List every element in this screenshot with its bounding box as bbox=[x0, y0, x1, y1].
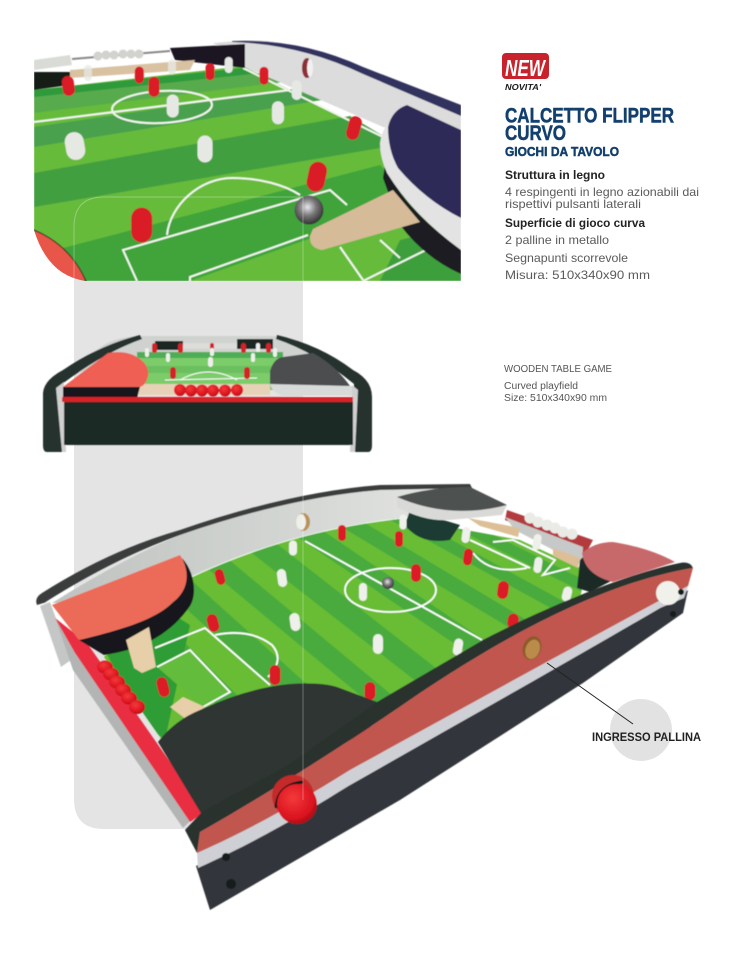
title bbox=[505, 104, 674, 159]
product features text: Superficie di gioco curva bbox=[505, 216, 645, 230]
left end cap bbox=[40, 602, 71, 667]
far goal blocks bbox=[155, 339, 273, 350]
english description text bbox=[504, 364, 612, 404]
white stripe bbox=[197, 586, 688, 868]
product features text: Misura: 510x340x90 mm bbox=[505, 268, 650, 282]
photo: main board bbox=[2, 484, 735, 910]
right white strip bbox=[350, 385, 358, 452]
product features text: 2 palline in metallo bbox=[505, 233, 609, 247]
left side rail bbox=[55, 618, 205, 828]
product features text bbox=[505, 168, 699, 282]
badge text novita: NOVITA' bbox=[505, 82, 542, 92]
badge: new bbox=[502, 53, 549, 92]
photo: board front view bbox=[43, 335, 372, 452]
badge text new: NEW bbox=[505, 55, 547, 81]
ball entry hole bbox=[519, 634, 545, 662]
product features text: Struttura in legno bbox=[505, 168, 605, 182]
faint panel edge over board bbox=[302, 490, 304, 800]
dark lower side bbox=[196, 590, 688, 910]
title: GIOCHI DA TAVOLO bbox=[505, 144, 619, 159]
large dark pad bbox=[158, 683, 377, 815]
wood flipper strip bbox=[137, 384, 270, 395]
front rim bbox=[185, 563, 693, 853]
salmon band bbox=[197, 568, 693, 853]
red pad bbox=[63, 352, 148, 398]
title: CURVO bbox=[505, 121, 566, 145]
back wall and rail bbox=[34, 40, 461, 130]
wooden paddles right bbox=[468, 518, 580, 568]
callout line bbox=[547, 663, 633, 724]
wall hole bbox=[296, 513, 310, 531]
right salmon pad bbox=[577, 542, 675, 592]
right dark arch bbox=[276, 335, 372, 452]
screws bbox=[222, 589, 684, 889]
pegs bbox=[145, 343, 277, 379]
red rail beads bbox=[97, 660, 145, 714]
left white strip bbox=[56, 382, 66, 452]
far side rail bbox=[183, 343, 237, 349]
left wooden paddles bbox=[126, 627, 205, 720]
english description text: Size: 510x340x90 mm bbox=[504, 393, 607, 404]
steel ball bbox=[294, 196, 324, 224]
white beads bbox=[524, 512, 578, 540]
product features text: 4 respingenti in legno azionabili dai bbox=[505, 185, 699, 199]
pitch markings bbox=[155, 518, 570, 707]
back wall bbox=[63, 336, 350, 372]
red rail bbox=[62, 397, 353, 402]
product features text: Segnapunti scorrevole bbox=[505, 251, 628, 265]
callout text: INGRESSO PALLINA bbox=[592, 732, 701, 744]
title: CALCETTO FLIPPER bbox=[505, 104, 674, 128]
right flipper pad bbox=[397, 487, 507, 541]
steel ball bbox=[382, 577, 394, 589]
grey pad bbox=[270, 353, 352, 396]
red knob bbox=[272, 775, 317, 824]
playfield surface bbox=[34, 66, 461, 281]
right flipper pad bbox=[380, 105, 461, 274]
pegs bbox=[155, 514, 573, 700]
red pad corner bbox=[34, 230, 86, 281]
english description text: WOODEN TABLE GAME bbox=[504, 364, 612, 375]
pitch markings bbox=[34, 68, 430, 281]
playfield bbox=[104, 518, 582, 739]
wooden flipper bbox=[310, 190, 420, 250]
left dark arch bbox=[43, 335, 142, 452]
red balls row bbox=[174, 384, 243, 396]
photo: close-up of playfield bbox=[34, 40, 461, 281]
callout circle bbox=[610, 699, 672, 761]
callout: ball entry bbox=[547, 663, 701, 761]
back wall bbox=[52, 488, 470, 603]
playfield bbox=[137, 350, 283, 390]
right rail bbox=[505, 510, 593, 565]
grey background panel bbox=[74, 197, 303, 829]
scoring beads bbox=[94, 50, 144, 60]
english description text: Curved playfield bbox=[504, 381, 578, 392]
left flipper pad bbox=[52, 555, 194, 655]
white knob bbox=[656, 581, 680, 605]
product features text: rispettivi pulsanti laterali bbox=[505, 197, 641, 211]
faint panel outline over photo bbox=[74, 197, 303, 281]
back rim bbox=[36, 484, 472, 605]
badge red tag bbox=[502, 53, 549, 79]
dark base bbox=[64, 402, 353, 445]
red and white pegs bbox=[61, 57, 363, 242]
